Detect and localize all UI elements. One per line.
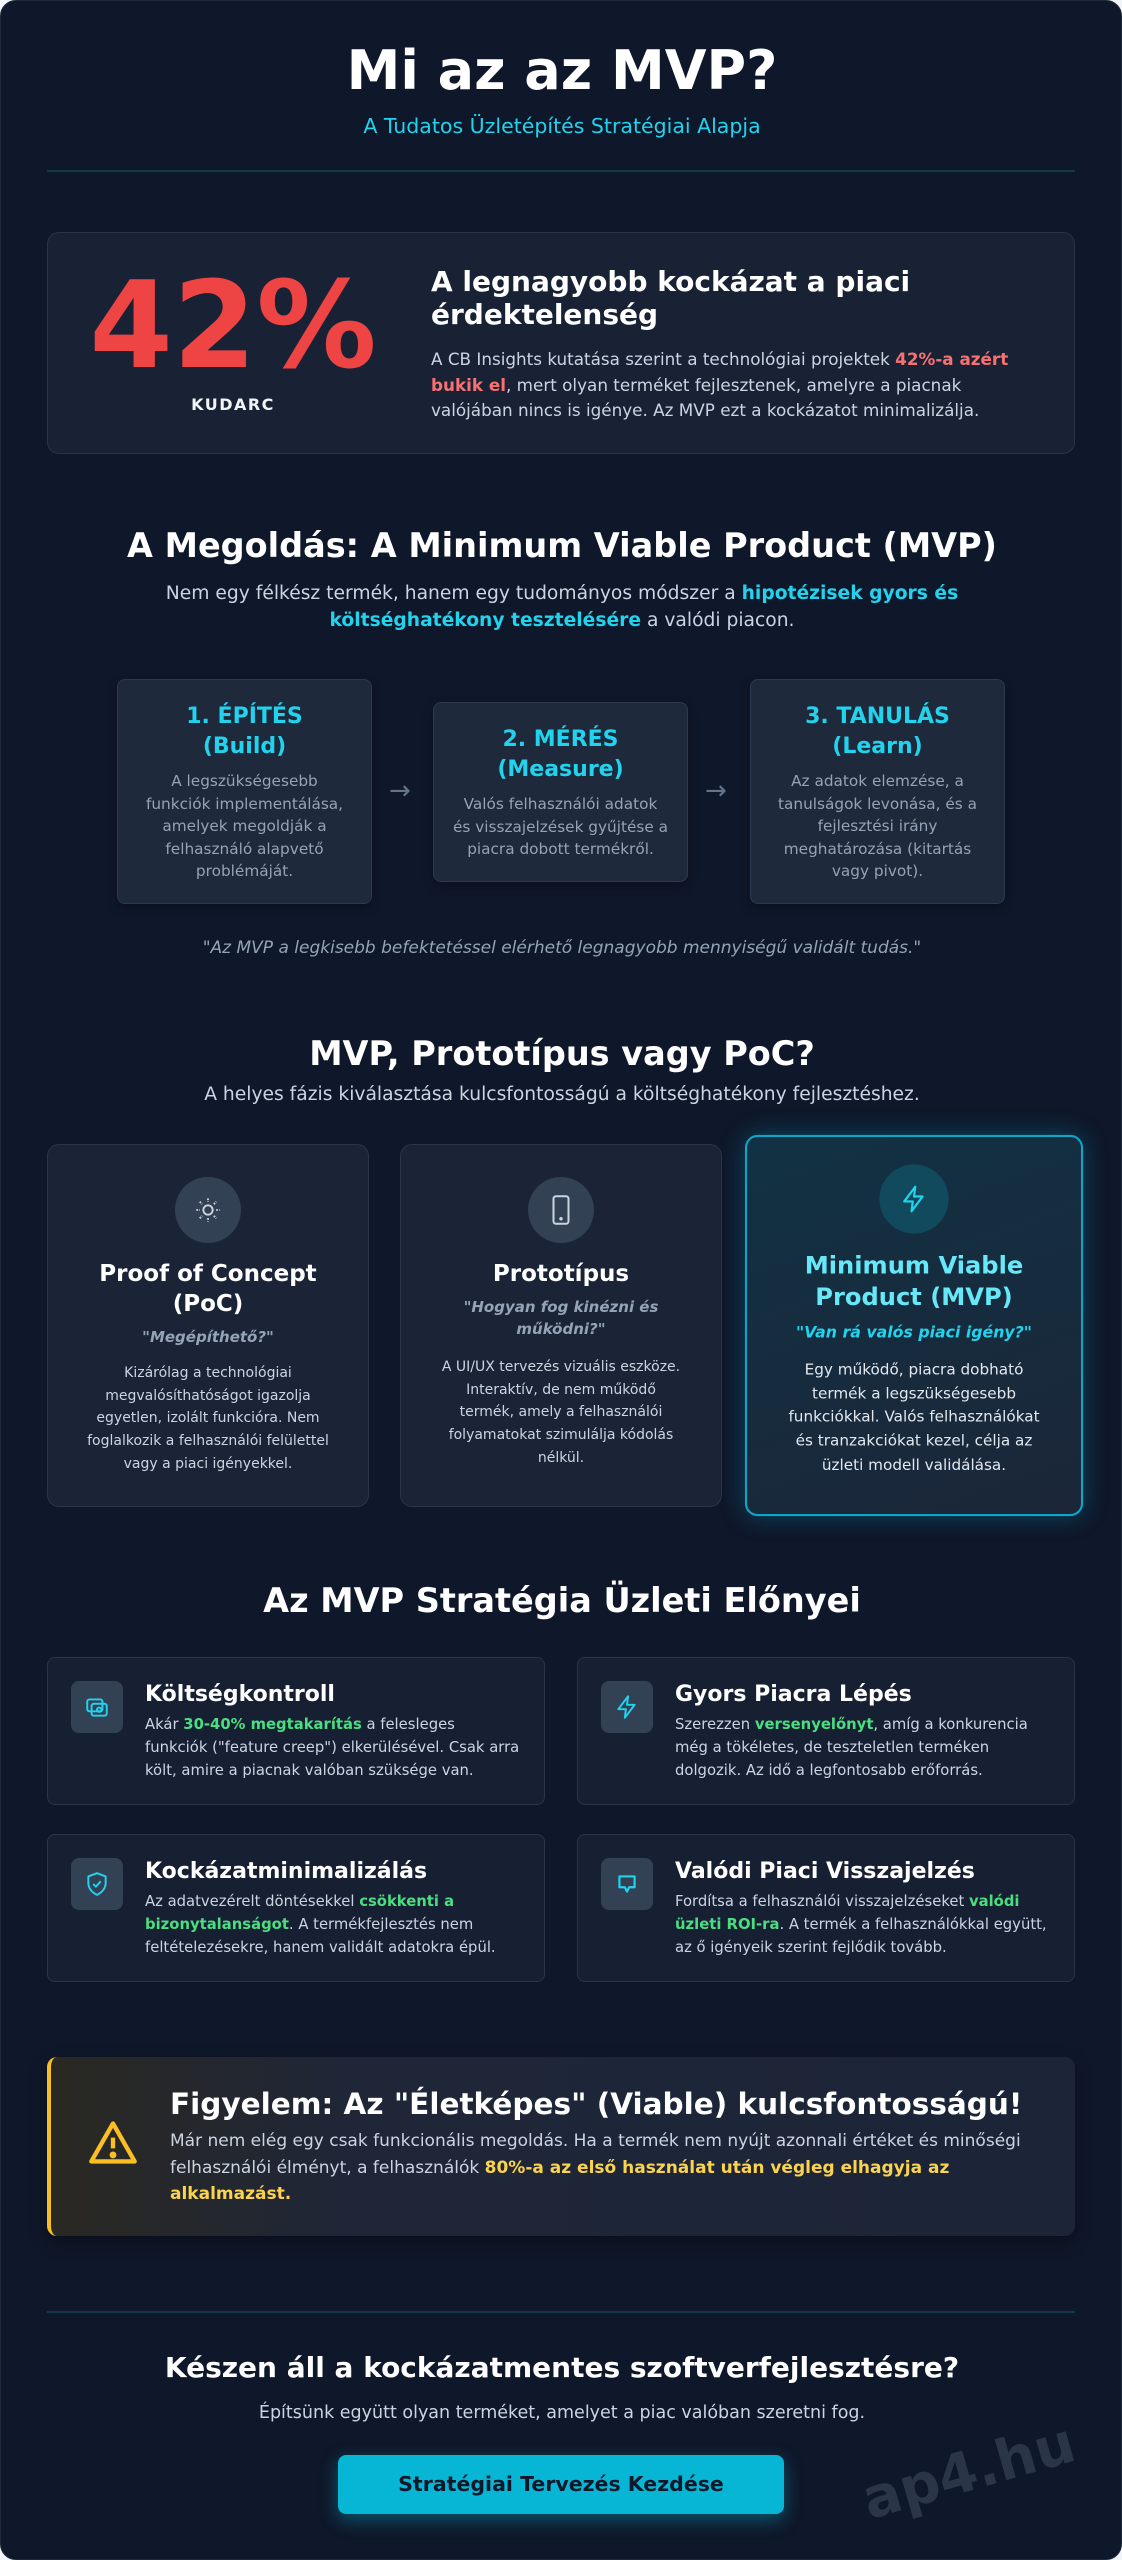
button: Stratégiai Tervezés Kezdése bbox=[398, 2472, 724, 2496]
icon: shield bbox=[71, 1858, 123, 1910]
step 2: measure bbox=[433, 702, 688, 882]
benefit: risk minimization bbox=[47, 1834, 545, 1982]
panel: MVP (highlighted) bbox=[745, 1135, 1083, 1516]
text: solution subtitle bbox=[166, 583, 958, 631]
benefit: market feedback: Valódi Piaci Visszajelzés bbox=[675, 1859, 975, 1884]
quote: "Az MVP a legkisebb befektetéssel elérhető legnagyobb mennyiségű validált tudás." bbox=[203, 938, 921, 958]
icon: phone bbox=[528, 1177, 594, 1243]
benefit: cost control bbox=[47, 1657, 545, 1805]
panel: statistic 42% bbox=[47, 232, 1075, 454]
benefit: fast market entry: dolgozik. Az idő a legfontosabb erőforrás. bbox=[675, 1762, 983, 1779]
heading: benefits: Az MVP Stratégia Üzleti Előnyei bbox=[263, 1581, 861, 1620]
step 3: learn: (Learn) bbox=[832, 734, 923, 759]
watermark: ap4.hu bbox=[855, 2410, 1082, 2533]
heading: solution: A Megoldás: A Minimum Viable Product (MVP) bbox=[127, 526, 997, 565]
panel: PoC: "Megépíthető?" bbox=[142, 1328, 274, 1346]
panel: prototype: Prototípus bbox=[493, 1261, 629, 1287]
benefit: fast market entry: még a tökéletes, de teszteletlen terméken bbox=[675, 1739, 989, 1756]
text: cta subtitle: Építsünk együtt olyan terméket, amelyet a piac valóban szeretni fog. bbox=[259, 2403, 865, 2423]
callout text: felhasználói élményt, a felhasználók 80%-a az első használat után végleg elhagyja az bbox=[170, 2158, 949, 2178]
panel: prototype: termék, amely a felhasználói bbox=[460, 1404, 662, 1420]
benefit: risk minimization: feltételezésekre, hanem validált adatokra épül. bbox=[145, 1939, 496, 1956]
panel: PoC: egyetlen, izolált funkcióra. Nem bbox=[96, 1410, 320, 1426]
benefit: risk minimization: bizonytalanságot. A termékfejlesztés nem bbox=[145, 1916, 473, 1933]
step 3: learn: meghatározása (kitartás bbox=[784, 840, 971, 858]
button bbox=[338, 2455, 784, 2514]
panel: MVP (highlighted): üzleti modell validálása. bbox=[822, 1457, 1006, 1474]
benefit: market feedback bbox=[577, 1834, 1075, 1982]
panel: PoC bbox=[47, 1144, 369, 1507]
callout heading: Figyelem: Az "Életképes" (Viable) kulcsfontosságú! bbox=[170, 2087, 1022, 2121]
body text bbox=[431, 349, 1008, 420]
benefit: cost control: Költségkontroll bbox=[145, 1682, 335, 1707]
benefit: cost control: Akár 30-40% megtakarítás a felesleges bbox=[145, 1716, 455, 1733]
arrow: → bbox=[705, 776, 727, 806]
icon: gear bbox=[175, 1177, 241, 1243]
panel: MVP (highlighted): "Van rá valós piaci igény?" bbox=[796, 1323, 1032, 1342]
title: Mi az az MVP? bbox=[347, 39, 777, 102]
text: comparison subtitle: A helyes fázis kiválasztása kulcsfontosságú a költséghatékony fejlesztéshez. bbox=[204, 1084, 920, 1105]
step 1: build: (Build) bbox=[203, 734, 286, 759]
panel: prototype: Interaktív, de nem működő bbox=[466, 1382, 656, 1398]
panel: PoC: (PoC) bbox=[173, 1291, 243, 1317]
step 2: measure: Valós felhasználói adatok bbox=[464, 795, 657, 813]
heading: comparison: MVP, Prototípus vagy PoC? bbox=[309, 1034, 815, 1073]
text: solution subtitle: költséghatékony tesztelésére a valódi piacon. bbox=[329, 610, 794, 631]
benefit: cost control: funkciók ("feature creep") elkerülésével. Csak arra bbox=[145, 1739, 519, 1756]
callout text: Már nem elég egy csak funkcionális megoldás. Ha a termék nem nyújt azonnali értéket és minőségi bbox=[170, 2131, 1021, 2151]
icon: warning triangle bbox=[89, 2121, 137, 2164]
panel: PoC: Proof of Concept bbox=[99, 1261, 317, 1287]
panel: prototype: nélkül. bbox=[538, 1450, 584, 1466]
step 3: learn: Az adatok elemzése, a bbox=[791, 772, 964, 790]
step 1: build: felhasználó alapvető bbox=[165, 840, 324, 858]
big number 42%: 42% bbox=[89, 257, 377, 396]
text: solution subtitle: Nem egy félkész termék, hanem egy tudományos módszer a hipotézisek gyors és bbox=[166, 583, 958, 604]
icon: lightning bbox=[879, 1164, 949, 1234]
heading bbox=[431, 265, 910, 331]
label KUDARC: KUDARC bbox=[191, 395, 275, 414]
benefit: market feedback: Fordítsa a felhasználói visszajelzéseket valódi bbox=[675, 1893, 1020, 1910]
panel: MVP (highlighted): és tranzakciókat kezel, célja az bbox=[796, 1433, 1032, 1450]
step 2: measure: 2. MÉRÉS bbox=[502, 727, 619, 752]
panel: MVP (highlighted): funkciókkal. Valós felhasználókat bbox=[788, 1409, 1040, 1426]
callout: warning bbox=[47, 2057, 1075, 2236]
step 2: measure: (Measure) bbox=[497, 757, 624, 782]
panel: prototype bbox=[400, 1144, 722, 1507]
panel: PoC: Kizárólag a technológiai bbox=[124, 1365, 292, 1381]
body text: valójában nincs is igénye. Az MVP ezt a kockázatot minimalizálja. bbox=[431, 400, 979, 420]
body text: bukik el, mert olyan terméket fejlesztenek, amelyre a piacnak bbox=[431, 375, 961, 395]
icon: money bbox=[71, 1681, 123, 1733]
step 3: learn bbox=[750, 679, 1005, 904]
benefit: market feedback: üzleti ROI-ra. A termék a felhasználókkal együtt, bbox=[675, 1916, 1047, 1933]
panel: PoC: vagy a piaci igényekkel. bbox=[124, 1456, 292, 1472]
panel: MVP (highlighted): Egy működő, piacra dobható bbox=[805, 1362, 1023, 1379]
step 3: learn: fejlesztési irány bbox=[818, 817, 937, 835]
callout text: alkalmazást. bbox=[170, 2184, 291, 2204]
panel: MVP (highlighted): Minimum Viable bbox=[805, 1253, 1023, 1280]
panel: prototype: működni?" bbox=[516, 1320, 606, 1338]
panel: MVP (highlighted): termék a legszükségesebb bbox=[812, 1386, 1016, 1402]
subtitle: A Tudatos Üzletépítés Stratégiai Alapja bbox=[363, 114, 761, 138]
panel: prototype: A UI/UX tervezés vizuális eszköze. bbox=[442, 1359, 680, 1375]
step 1: build: funkciók implementálása, bbox=[146, 795, 343, 813]
step 2: measure: és visszajelzések gyűjtése a bbox=[453, 818, 668, 836]
panel: prototype: "Hogyan fog kinézni és bbox=[464, 1298, 658, 1316]
step 1: build bbox=[117, 679, 372, 904]
panel: MVP (highlighted): Product (MVP) bbox=[815, 1284, 1013, 1311]
icon: chat bbox=[601, 1858, 653, 1910]
benefit: cost control: költ, amire a piacnak valóban szüksége van. bbox=[145, 1762, 474, 1779]
step 1: build: amelyek megoldják a bbox=[162, 817, 327, 835]
step 1: build: problémáját. bbox=[196, 862, 293, 880]
benefit: risk minimization: Az adatvezérelt döntésekkel csökkenti a bbox=[145, 1893, 454, 1910]
step 1: build: 1. ÉPÍTÉS bbox=[186, 704, 303, 729]
benefit: fast market entry bbox=[577, 1657, 1075, 1805]
step 3: learn: 3. TANULÁS bbox=[805, 704, 950, 729]
step 3: learn: tanulságok levonása, és a bbox=[778, 795, 977, 813]
benefit: market feedback: az ő igényeik szerint fejlődik tovább. bbox=[675, 1939, 947, 1956]
panel: PoC: megvalósíthatóságot igazolja bbox=[105, 1388, 311, 1404]
benefit: risk minimization: Kockázatminimalizálás bbox=[145, 1859, 427, 1884]
body text: A CB Insights kutatása szerint a technológiai projektek 42%-a azért bbox=[431, 349, 1008, 369]
heading: A legnagyobb kockázat a piaci bbox=[431, 265, 910, 298]
step 2: measure: piacra dobott termékről. bbox=[467, 840, 654, 858]
arrow: → bbox=[389, 776, 411, 806]
benefit: fast market entry: Szerezzen versenyelőnyt, amíg a konkurencia bbox=[675, 1716, 1028, 1733]
callout text bbox=[170, 2131, 1021, 2204]
icon: lightning bbox=[601, 1681, 653, 1733]
panel: PoC: foglalkozik a felhasználói felülettel bbox=[87, 1433, 329, 1449]
heading: call to action: Készen áll a kockázatmentes szoftverfejlesztésre? bbox=[165, 2351, 959, 2384]
heading: érdektelenség bbox=[431, 298, 658, 331]
panel: prototype: folyamatokat szimulálja kódolás bbox=[449, 1427, 673, 1443]
benefit: fast market entry: Gyors Piacra Lépés bbox=[675, 1682, 912, 1707]
step 3: learn: vagy pivot). bbox=[832, 862, 923, 880]
step 1: build: A legszükségesebb bbox=[171, 772, 318, 790]
